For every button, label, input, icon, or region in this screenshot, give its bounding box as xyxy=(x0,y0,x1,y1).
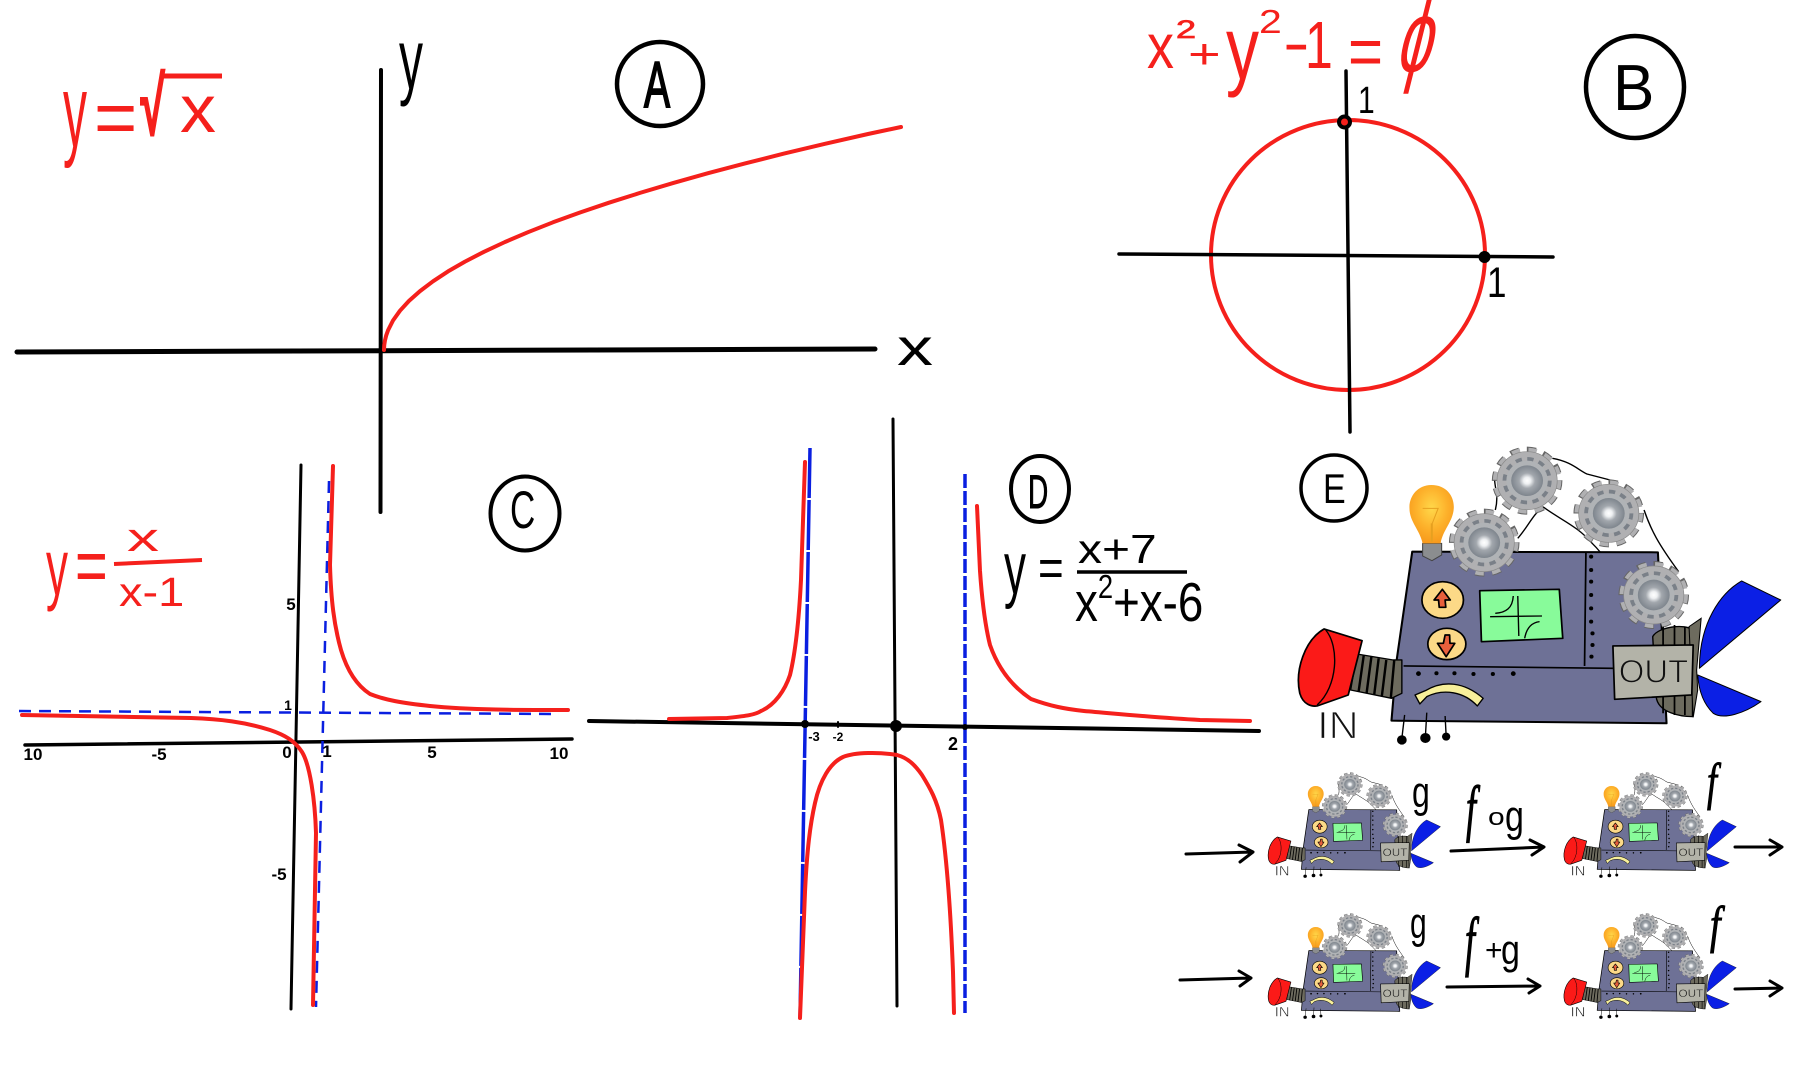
label f plus g with arrow xyxy=(1447,906,1540,993)
formula D: x+7 xyxy=(1078,527,1157,572)
badge C: C xyxy=(510,480,535,540)
formula B: 2 xyxy=(1176,15,1196,44)
label f plus g with arrow: g xyxy=(1501,927,1520,974)
machine g xyxy=(1268,774,1441,880)
formula A xyxy=(63,54,222,170)
formula B: y xyxy=(1226,0,1260,98)
formula D xyxy=(1004,527,1203,633)
axes B xyxy=(1119,71,1553,432)
curve D middle branch xyxy=(800,753,954,1018)
formula C: y xyxy=(46,523,68,612)
label f of g with arrow: o xyxy=(1488,803,1505,830)
label f of g with arrow xyxy=(1451,774,1544,855)
curve D right branch xyxy=(977,506,1250,721)
machine g: IN xyxy=(1275,864,1290,880)
tick labels C: 5 xyxy=(427,743,437,762)
formula B: 1 xyxy=(1305,7,1333,83)
label f: f xyxy=(1710,895,1725,953)
machine g: OUT xyxy=(1383,988,1407,1000)
badge E: E xyxy=(1323,466,1346,513)
axes A xyxy=(17,70,875,512)
points D xyxy=(801,720,968,732)
badge E xyxy=(1301,455,1367,521)
formula B: = xyxy=(1348,12,1383,90)
formula C: x xyxy=(127,516,159,560)
asymptotes D xyxy=(800,448,965,1018)
formula D: y xyxy=(1004,527,1026,609)
curve C left branch xyxy=(22,715,316,1005)
formula B: + xyxy=(1188,31,1221,77)
label f of g with arrow: f xyxy=(1466,774,1480,842)
badge D xyxy=(1011,456,1069,522)
circle curve xyxy=(1211,120,1485,390)
row 2: sum of functions xyxy=(1180,895,1782,1021)
panel E: function machine xyxy=(1298,450,1781,747)
badge A xyxy=(617,42,703,126)
formula B: - xyxy=(1283,9,1310,76)
large machine: OUT xyxy=(1619,653,1688,689)
axis label x: x xyxy=(897,319,933,377)
tick labels D: -2 xyxy=(833,730,844,744)
machine f xyxy=(1564,915,1736,1021)
formula D: = xyxy=(1038,539,1064,598)
tick labels B xyxy=(1358,80,1506,307)
label g: g xyxy=(1412,768,1430,817)
machine f xyxy=(1564,774,1736,880)
tick labels C xyxy=(24,595,568,884)
large machine: IN xyxy=(1317,702,1359,747)
tick labels C: 10 xyxy=(24,745,42,764)
tick labels D: -3 xyxy=(808,729,820,744)
axis label y: y xyxy=(399,13,423,107)
badge B xyxy=(1586,36,1684,138)
formula B xyxy=(1147,0,1452,98)
formula D: x xyxy=(1075,571,1098,633)
formula C: = xyxy=(75,523,108,609)
formula D: +x-6 xyxy=(1113,571,1203,633)
formula D: 2 xyxy=(1098,570,1113,606)
badge B: B xyxy=(1613,53,1654,124)
badge C xyxy=(490,476,560,550)
machine f: IN xyxy=(1571,864,1585,880)
formula C xyxy=(46,516,202,615)
formula B: x xyxy=(1147,12,1174,82)
curve: y = sqrt x xyxy=(384,127,901,350)
machine g xyxy=(1268,915,1441,1021)
formula C: x-1 xyxy=(119,570,184,615)
panel A: square root graph xyxy=(17,13,933,512)
badge D: D xyxy=(1028,467,1048,519)
row 1: composition of functions xyxy=(1186,752,1782,880)
tick labels D: 2 xyxy=(948,734,958,754)
curve C right branch xyxy=(330,466,568,710)
asymptotes C xyxy=(19,481,559,1007)
curve D left branch xyxy=(669,462,805,719)
label f plus g with arrow: f xyxy=(1465,906,1479,978)
axes C xyxy=(25,465,572,1009)
formula A: √ xyxy=(140,62,165,151)
machine f: OUT xyxy=(1678,988,1703,1000)
badge A: A xyxy=(644,49,670,122)
panel B: unit circle xyxy=(1119,0,1684,432)
panel C: y = x/(x-1) xyxy=(19,465,572,1009)
label f of g with arrow: g xyxy=(1505,792,1524,841)
tick labels B: 1 xyxy=(1358,80,1375,122)
formula A: y xyxy=(63,54,87,170)
large machine xyxy=(1298,450,1781,747)
output arrow xyxy=(1735,840,1782,855)
input arrow xyxy=(1186,845,1253,862)
axes D xyxy=(589,419,1259,1006)
tick labels C: 0 xyxy=(282,743,292,762)
tick labels C: -5 xyxy=(271,865,287,884)
tick labels C: 10 xyxy=(550,744,568,763)
tick labels D xyxy=(808,729,958,754)
tick labels C: 5 xyxy=(286,595,296,614)
tick labels C: 1 xyxy=(322,742,332,761)
formula A: = xyxy=(94,76,137,161)
machine f: OUT xyxy=(1678,847,1703,859)
formula A: x xyxy=(180,71,216,146)
machine g: OUT xyxy=(1383,847,1407,859)
points xyxy=(1339,116,1490,263)
label g: g xyxy=(1410,898,1427,947)
tick labels C: 1 xyxy=(284,697,292,713)
panel D: y = (x+7)/(x^2+x-6) xyxy=(589,419,1259,1018)
output arrow xyxy=(1735,981,1782,996)
formula B: 2 xyxy=(1259,3,1282,40)
machine g: IN xyxy=(1275,1005,1290,1021)
input arrow xyxy=(1180,971,1251,986)
machine f: IN xyxy=(1571,1005,1585,1021)
tick labels C: -5 xyxy=(151,745,167,764)
label f: f xyxy=(1707,752,1721,811)
tick labels B: 1 xyxy=(1487,260,1506,307)
label f plus g with arrow: + xyxy=(1485,934,1503,967)
